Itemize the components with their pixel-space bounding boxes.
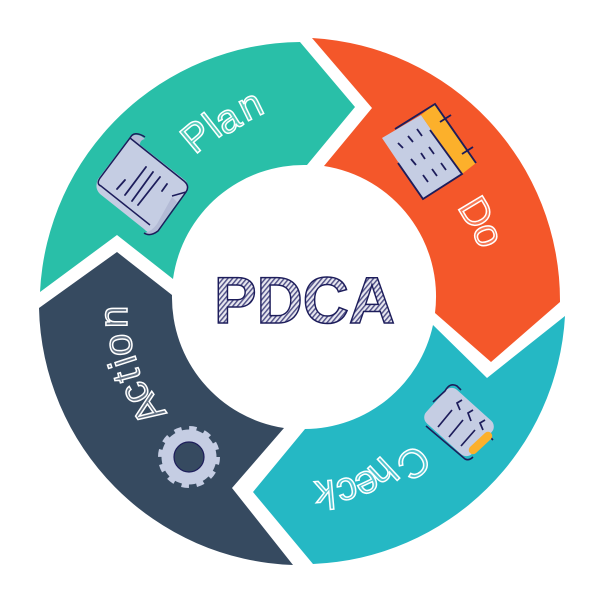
panel: Check segment (253, 316, 565, 564)
icon: paper scroll (96, 134, 188, 235)
label: Plan: Plan (173, 81, 270, 162)
label: Action: Action (92, 306, 174, 433)
icon: clipboard (421, 385, 497, 460)
panel: Action segment (39, 252, 293, 565)
label: Do: Do (449, 189, 512, 253)
title: PDCA: PDCA (214, 263, 395, 337)
icon: gear (160, 428, 218, 486)
panel: Plan segment (40, 42, 355, 292)
panel: Do segment (312, 38, 560, 362)
icon: calendar (382, 104, 476, 199)
label: Check: Check (312, 436, 438, 517)
